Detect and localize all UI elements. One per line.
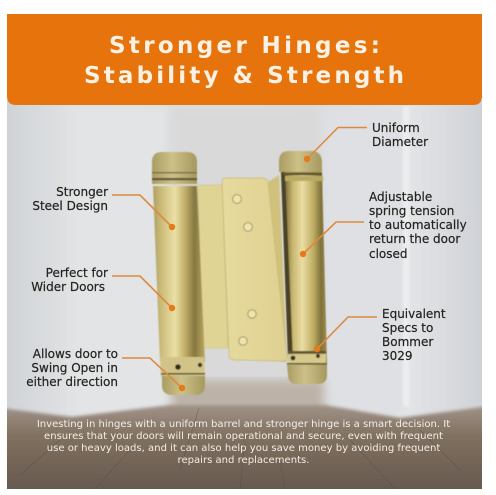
description text: use or heavy loads, and it can also help you save money by avoiding frequent (47, 443, 440, 454)
back leaf plate (198, 185, 228, 348)
left barrel (152, 152, 205, 395)
panel: wooden floor (0, 405, 490, 495)
right back leaf (268, 175, 287, 362)
callout: adjustable spring tension (300, 190, 467, 261)
callout: perfect for wider doors: Perfect for (46, 266, 108, 280)
callout: equivalent specs (314, 307, 446, 363)
callout: stronger steel design: Stronger (56, 185, 108, 199)
description text: repairs and replacements. (178, 455, 309, 466)
callout: adjustable spring tension: to automatically (369, 218, 467, 232)
callout: swing open: Swing Open in (31, 361, 118, 375)
callout: equivalent specs: Specs to (382, 321, 433, 335)
callout: uniform diameter: Uniform (372, 121, 420, 135)
callout: adjustable spring tension: spring tension (369, 204, 454, 218)
screw holes (233, 195, 256, 345)
callout: adjustable spring tension: closed (369, 247, 408, 261)
callout: swing open: Allows door to (33, 347, 118, 361)
panel: orange title banner (7, 14, 482, 105)
callout: stronger steel design: Steel Design (32, 199, 108, 213)
description text: ensures that your doors will remain operational and secure, even with frequent (44, 431, 443, 442)
callout: equivalent specs: Equivalent (382, 307, 446, 321)
callout: stronger steel design (32, 185, 175, 230)
centre leaf plate (222, 178, 287, 361)
right barrel (279, 151, 327, 384)
callout: uniform diameter (304, 121, 428, 162)
callout: adjustable spring tension: return the door (369, 232, 460, 246)
title: Stability & Strength (84, 63, 404, 89)
callout: swing open: either direction (26, 375, 118, 389)
description text (37, 419, 450, 466)
hinge product image (152, 151, 327, 395)
callout: equivalent specs: 3029 (382, 349, 413, 363)
description text: Investing in hinges with a uniform barrel and stronger hinge is a smart decision. It (37, 419, 450, 430)
callout: swing open (26, 347, 185, 391)
title (84, 33, 404, 89)
callout: perfect for wider doors: Wider Doors (31, 280, 105, 294)
callout: perfect for wider doors (31, 266, 175, 311)
callout: uniform diameter: Diameter (372, 135, 428, 149)
panel: room background (7, 100, 482, 420)
callout: adjustable spring tension: Adjustable (369, 190, 432, 204)
callout: equivalent specs: Bommer (382, 335, 433, 349)
title: Stronger Hinges: (109, 33, 380, 59)
